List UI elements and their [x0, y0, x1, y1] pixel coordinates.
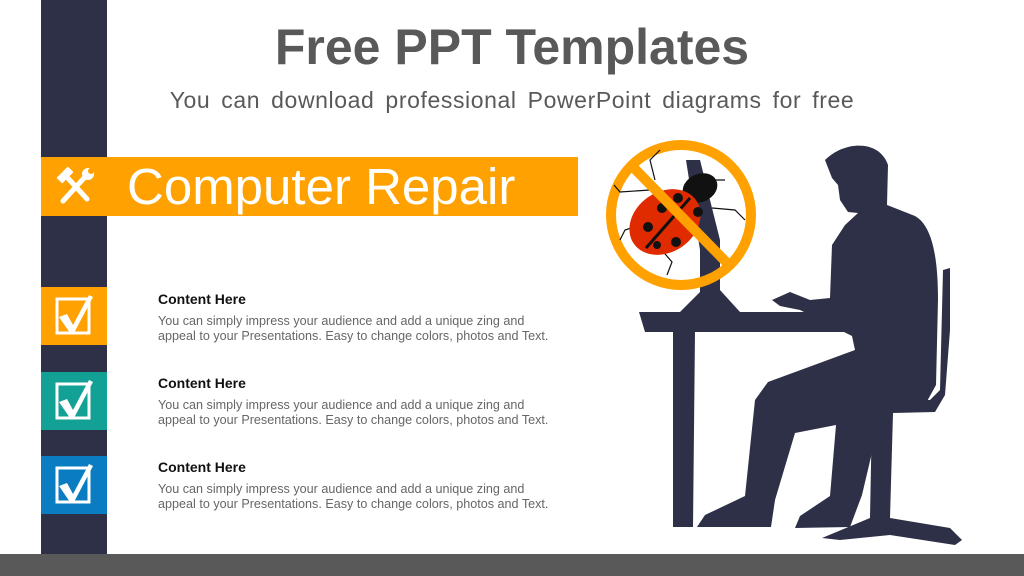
bottom bar — [0, 554, 1024, 576]
banner text: Computer Repair — [127, 158, 515, 215]
monitor — [680, 160, 740, 312]
left dark bar — [41, 0, 107, 554]
icon: tools — [56, 167, 94, 204]
item 1 heading: Content Here — [158, 291, 246, 307]
item 3 heading: Content Here — [158, 459, 246, 475]
checkbox icon 2 — [41, 372, 107, 430]
banner: Computer Repair — [41, 157, 578, 216]
subtitle: You can download professional PowerPoint diagrams for free — [170, 87, 854, 113]
item 2 heading: Content Here — [158, 375, 246, 391]
checkbox icon 3 — [41, 456, 107, 514]
desk — [639, 312, 857, 527]
item 2 text: You can simply impress your audience and add a unique zing and appeal to your Presentations. Easy to change colors, photos and Text. — [158, 398, 548, 427]
icon: no-bug sign — [611, 145, 751, 285]
item 1 text: You can simply impress your audience and add a unique zing and appeal to your Presentations. Easy to change colors, photos and Text. — [158, 314, 548, 343]
item 3 text: You can simply impress your audience and add a unique zing and appeal to your Presentations. Easy to change colors, photos and Text. — [158, 482, 548, 511]
title: Free PPT Templates — [275, 19, 749, 75]
person — [697, 146, 938, 528]
checkbox icon 1 — [41, 287, 107, 345]
chair — [822, 268, 962, 545]
